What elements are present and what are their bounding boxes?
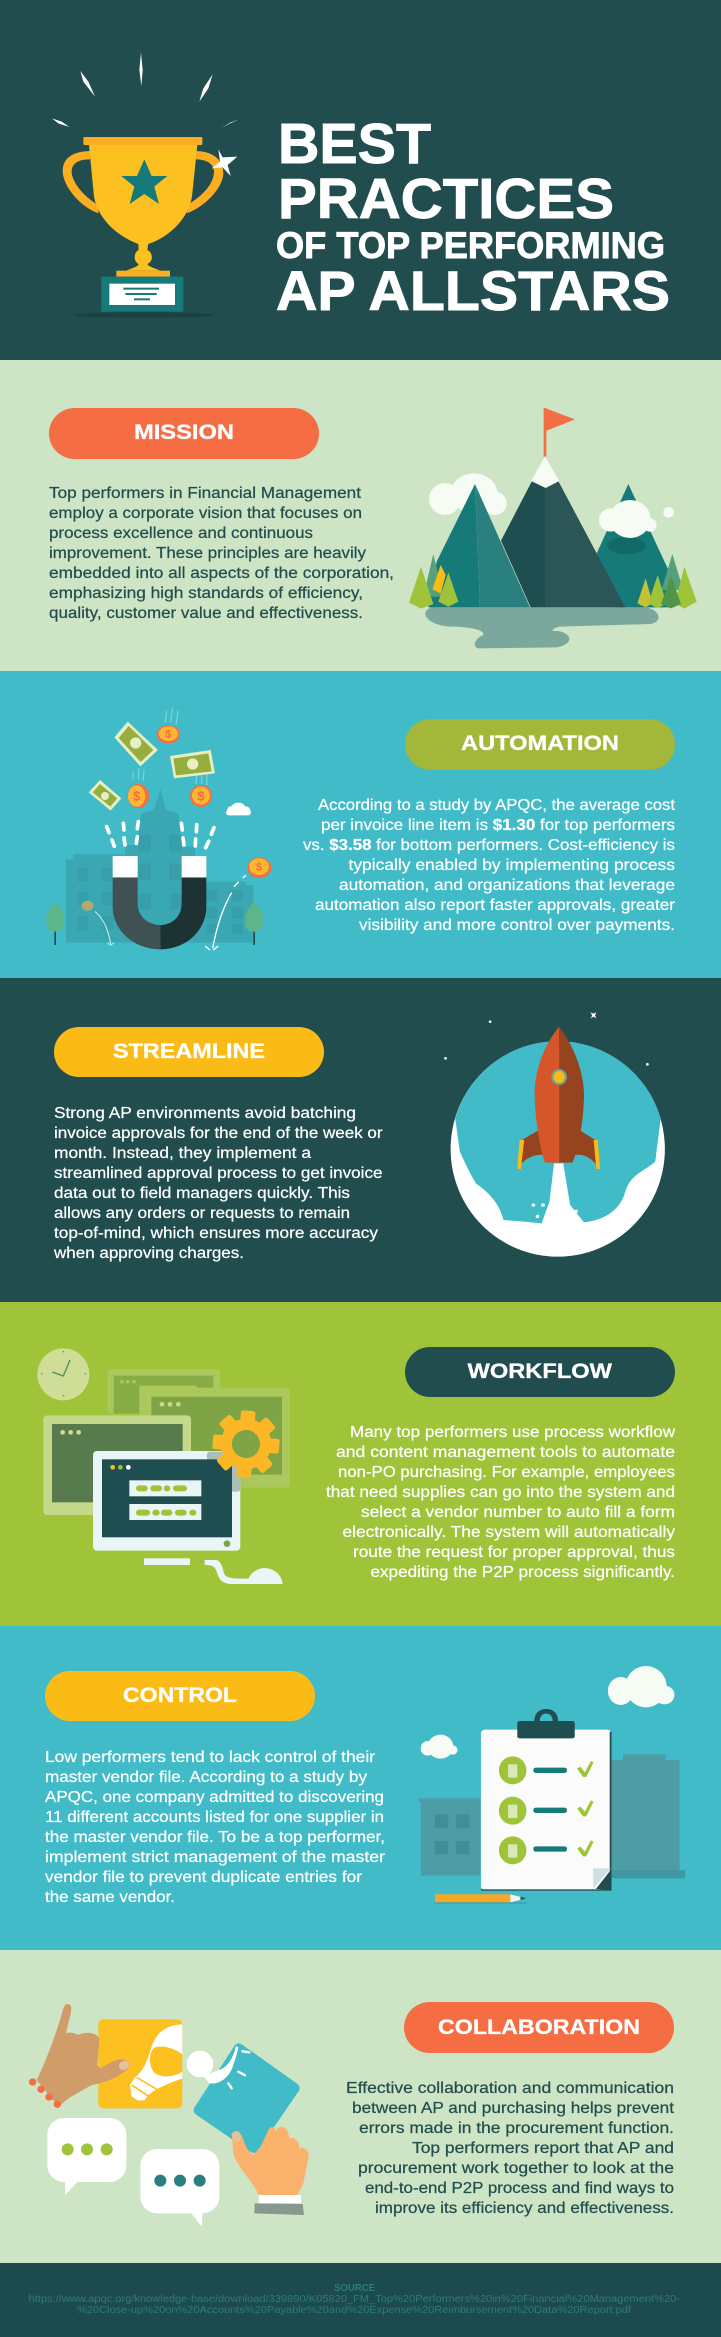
text block: workflow: electronically. The system will automatically <box>342 1524 675 1541</box>
text block: workflow: select a vendor number to auto fill a form <box>361 1504 675 1521</box>
heading: control: CONTROL <box>123 1684 237 1707</box>
panel: source footer <box>0 2263 721 2337</box>
text block: mission: process excellence and continuous <box>49 525 313 542</box>
text block: source: SOURCE <box>334 2283 375 2294</box>
text block: control: Low performers tend to lack control of their <box>45 1749 375 1766</box>
text block: control: APQC, one company admitted to discovering <box>45 1789 384 1806</box>
text block: control: vendor file to prevent duplicate entries for <box>45 1869 362 1886</box>
text block: workflow: non-PO purchasing. For example, employees <box>338 1464 675 1481</box>
text block: mission: employ a corporate vision that focuses on <box>49 505 362 522</box>
text block: control: 11 different accounts listed for one supplier in <box>45 1809 384 1826</box>
text block: streamline <box>53 1105 383 1262</box>
icon: hands joining puzzle and speech bubbles <box>29 2004 309 2227</box>
text block: collaboration: between AP and purchasing helps prevent <box>352 2100 675 2117</box>
icon: magnet attracting money <box>46 707 271 950</box>
title: AP ALLSTARS <box>276 259 670 322</box>
title: OF TOP PERFORMING <box>276 225 665 266</box>
text block: automation: per invoice line item is $1.30 for top performers <box>321 817 675 834</box>
heading: mission: MISSION <box>134 421 234 444</box>
icon: rocket <box>444 1012 665 1257</box>
text block: mission: improvement. These principles are heavily <box>49 545 366 562</box>
text block: workflow: expediting the P2P process significantly. <box>370 1564 675 1581</box>
text block: mission: emphasizing high standards of efficiency, <box>49 585 363 602</box>
text block: automation: visibility and more control over payments. <box>359 917 675 934</box>
text block: source: https://www.apqc.org/knowledge-base/download/339890/K05820_FM_Top%20Performers%20in%20Financial%20Management%20- <box>28 2294 680 2305</box>
text block: automation: According to a study by APQC, the average cost <box>318 797 676 814</box>
icon: magnet attracting money: $ <box>165 729 172 741</box>
text block: workflow: that need supplies can go into the system and <box>326 1484 675 1501</box>
text block: streamline: month. Instead, they implement a <box>54 1145 311 1162</box>
panel: control <box>0 1626 721 1950</box>
text block: streamline: allows any orders or requests to remain <box>54 1205 350 1222</box>
icon: magnet attracting money: $ <box>256 862 263 874</box>
text block: streamline: streamlined approval process to get invoice <box>54 1165 382 1182</box>
heading: collaboration: COLLABORATION <box>438 2016 640 2039</box>
text block: automation: typically enabled by implementing process <box>348 857 675 874</box>
heading: automation <box>405 719 675 770</box>
text block: control: the same vendor. <box>45 1889 175 1906</box>
text block: source: %20Close-up%20on%20Accounts%20Payable%20and%20Expense%20Reimbursement%20Data%20Report.pdf <box>77 2305 631 2316</box>
text block: control: the master vendor file. To be a top performer, <box>45 1829 385 1846</box>
text block: streamline: top-of-mind, which ensures more accuracy <box>54 1225 378 1242</box>
text block: collaboration: procurement work together to look at the <box>358 2160 674 2177</box>
text block: automation: automation also report faster approvals, greater <box>315 897 675 914</box>
text block: collaboration: Effective collaboration and communication <box>346 2080 674 2097</box>
title <box>276 112 670 322</box>
text block: collaboration: improve its efficiency and effectiveness. <box>375 2200 674 2217</box>
heading: streamline: STREAMLINE <box>113 1040 265 1063</box>
panel: automation <box>0 671 721 978</box>
icon: magnet attracting money: $ <box>197 789 205 804</box>
text block: workflow: route the request for proper approval, thus <box>353 1544 675 1561</box>
icon: magnet attracting money: $ <box>133 789 141 804</box>
text block: collaboration: Top performers report that AP and <box>412 2140 674 2157</box>
heading: streamline <box>54 1027 324 1077</box>
text block: collaboration <box>346 2080 675 2217</box>
text block: collaboration: errors made in the procurement function. <box>359 2120 674 2137</box>
icon: mountains with flag <box>409 408 697 648</box>
text block: mission: quality, customer value and effectiveness. <box>49 605 363 622</box>
heading: collaboration <box>404 2002 674 2053</box>
heading: automation: AUTOMATION <box>461 732 619 755</box>
text block: collaboration: end-to-end P2P process and find ways to <box>365 2180 674 2197</box>
text block: source <box>28 2283 680 2316</box>
panel: workflow <box>0 1302 721 1626</box>
text block: automation <box>303 797 676 934</box>
icon: workflow screens, gear and clock <box>37 1348 290 1584</box>
panel: collaboration <box>0 1950 721 2263</box>
title: PRACTICES <box>278 167 614 231</box>
heading: mission <box>49 408 319 459</box>
text block: streamline: Strong AP environments avoid batching <box>54 1105 356 1122</box>
text block: streamline: invoice approvals for the end of the week or <box>54 1125 382 1142</box>
text block: mission <box>49 485 394 622</box>
text block: streamline: when approving charges. <box>53 1245 244 1262</box>
text block: mission: embedded into all aspects of the corporation, <box>49 565 394 582</box>
title: BEST <box>278 112 431 176</box>
text block: workflow <box>326 1424 676 1581</box>
heading: workflow <box>405 1347 675 1397</box>
text block: automation: vs. $3.58 for bottom performers. Cost-efficiency is <box>303 837 675 854</box>
text block: workflow: and content management tools to automate <box>336 1444 675 1461</box>
heading: workflow: WORKFLOW <box>468 1360 612 1383</box>
text block: control <box>45 1749 385 1906</box>
heading: control <box>45 1671 315 1721</box>
text block: control: implement strict management of the master <box>45 1849 385 1866</box>
text block: control: master vendor file. According to a study by <box>45 1769 367 1786</box>
text block: workflow: Many top performers use process workflow <box>350 1424 676 1441</box>
text block: mission: Top performers in Financial Management <box>49 485 362 502</box>
icon: trophy <box>52 53 239 318</box>
panel: streamline <box>0 978 721 1302</box>
panel: mission <box>0 360 721 671</box>
panel: header <box>0 0 721 360</box>
icon: checklist clipboard <box>418 1666 685 1904</box>
text block: automation: automation, and organizations that leverage <box>339 877 675 894</box>
text block: streamline: data out to field managers quickly. This <box>54 1185 350 1202</box>
